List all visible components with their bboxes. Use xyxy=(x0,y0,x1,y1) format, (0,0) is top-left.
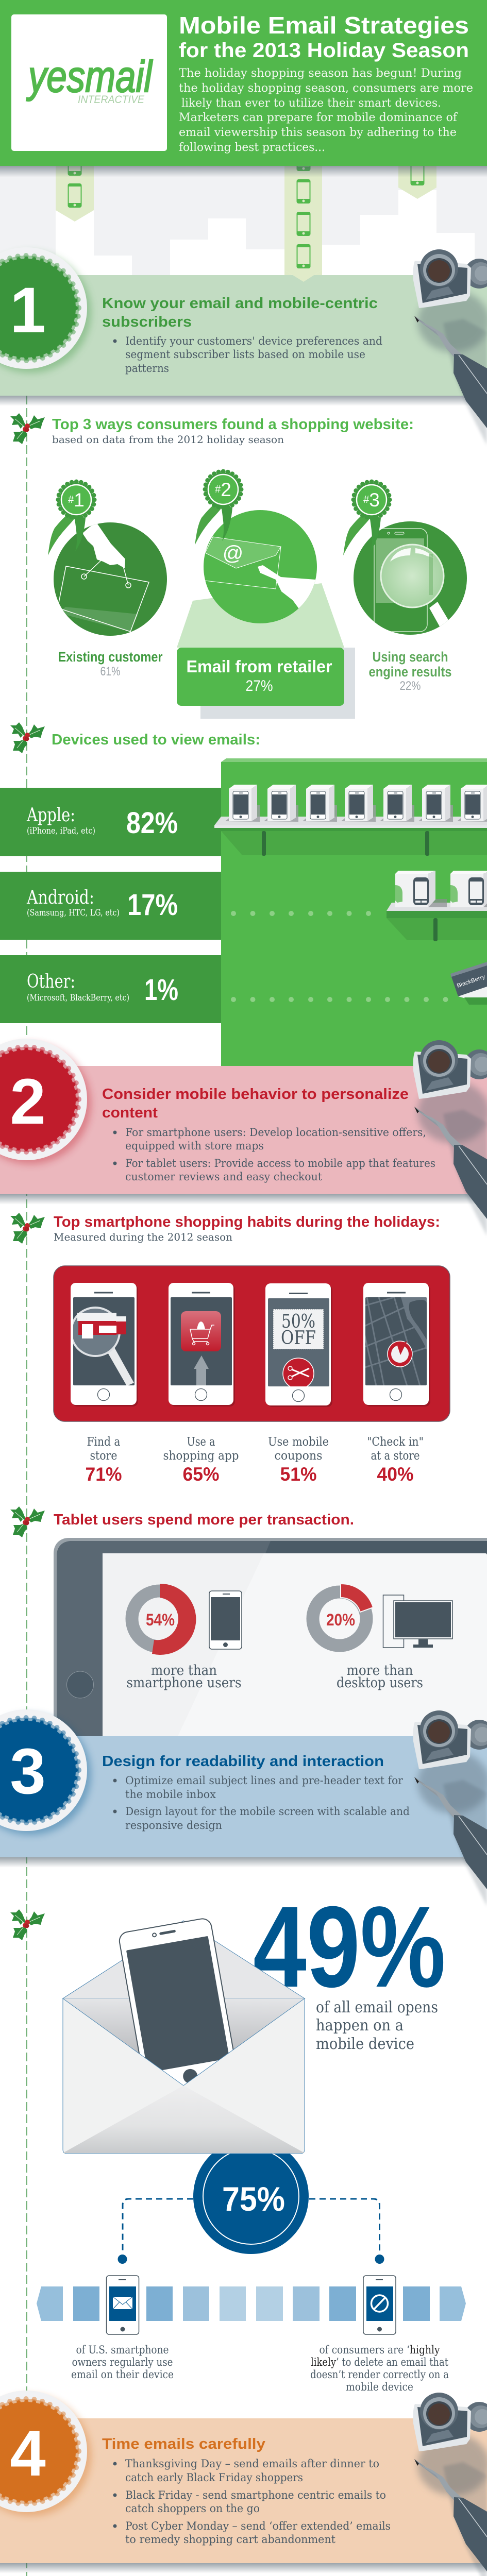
holly: 49 percent xyxy=(10,1909,45,1940)
labels: at a store xyxy=(371,1449,419,1463)
shadow card xyxy=(200,616,355,719)
bullet list xyxy=(113,335,382,375)
labels: shopping app xyxy=(163,1449,239,1463)
ribbon: right arrow of phones xyxy=(398,162,436,199)
panel: search engine results: # xyxy=(363,494,370,505)
label xyxy=(337,1663,423,1691)
bullet list: For tablet users: Provide access to mobile app that features xyxy=(125,1157,435,1170)
phone: coupons: 50% xyxy=(281,1311,315,1332)
ink and pen 1 xyxy=(413,249,487,445)
bullet list: Post Cyber Monday – send ‘offer extended’ emails xyxy=(125,2520,391,2532)
beam xyxy=(177,583,344,648)
card: Email from retailer xyxy=(187,657,332,676)
label xyxy=(369,649,451,680)
labels: 71% xyxy=(86,1464,122,1485)
phone: shopping app xyxy=(169,1283,235,1406)
bullet list xyxy=(113,1774,410,1832)
heading: Time emails carefully xyxy=(102,2436,265,2452)
bar: Apple xyxy=(0,788,221,856)
progress dots: android xyxy=(231,911,371,916)
logo card: INTERACTIVE xyxy=(78,94,145,106)
holly: top 3 ways xyxy=(10,413,45,444)
bar: Android xyxy=(0,872,221,940)
ink and pen 2 xyxy=(413,1040,487,1236)
label: smartphone users xyxy=(127,1675,241,1691)
panel: existing customer: # xyxy=(68,494,74,505)
heading: top 3 ways: based on data from the 2012 holiday season xyxy=(52,433,284,446)
bullet list: Optimize email subject lines and pre-header text for xyxy=(125,1774,404,1787)
heading: Consider mobile behavior to personalize xyxy=(102,1086,409,1103)
bullet list: Design layout for the mobile screen with scalable and xyxy=(125,1805,410,1818)
heading: tablet: Tablet users spend more per transaction. xyxy=(54,1512,354,1528)
badge 1: 1 xyxy=(10,275,46,346)
bullet list: patterns xyxy=(125,362,169,375)
panel: existing customer: 1 xyxy=(74,489,85,511)
labels: Use mobile xyxy=(268,1435,329,1449)
panel: existing customer xyxy=(48,482,167,679)
panel: search engine results: 3 xyxy=(369,489,380,511)
labels: Find a xyxy=(87,1435,121,1449)
progress dots: other xyxy=(231,997,448,1002)
bullet list: to remedy shopping cart abandonment xyxy=(125,2533,336,2546)
label: engine results xyxy=(369,664,451,680)
stat: 49 percent xyxy=(253,1883,446,2053)
donut: 54 percent xyxy=(132,1584,196,1655)
caption: smartphone owners: of U.S. smartphone xyxy=(76,2344,169,2356)
section 2 band xyxy=(0,1066,487,1205)
bullet list: responsive design xyxy=(125,1819,222,1832)
android shelf xyxy=(387,871,487,941)
caption: smartphone owners xyxy=(71,2344,174,2381)
intro text: Marketers can prepare for mobile dominance of xyxy=(179,111,458,124)
labels xyxy=(86,1435,424,1485)
stat: 49 percent: happen on a xyxy=(316,2016,404,2035)
heading: smartphone habits xyxy=(54,1214,440,1243)
title xyxy=(179,12,469,62)
bullet list: equipped with store maps xyxy=(125,1140,264,1152)
dashed timeline xyxy=(26,396,27,2576)
badge 3: 3 xyxy=(10,1736,46,1807)
phone: find a store xyxy=(71,1283,138,1406)
heading xyxy=(102,1086,409,1121)
heading: content xyxy=(102,1105,158,1121)
heading: devices: Devices used to view emails: xyxy=(52,732,260,748)
badge 1 xyxy=(0,247,91,373)
badge 2: 2 xyxy=(10,1066,46,1138)
phone: email xyxy=(106,2276,139,2334)
caption: delete email: likely’ to delete an email that xyxy=(311,2356,448,2368)
stat: 75 percent circle xyxy=(193,2139,309,2254)
panel: smartphone habits xyxy=(54,1266,450,1485)
badge 4 xyxy=(0,2391,91,2516)
icon: phone xyxy=(209,1591,242,1649)
label: Existing customer xyxy=(58,649,163,665)
card: 27% xyxy=(245,677,273,694)
badge 3 xyxy=(0,1709,91,1835)
icon: envelope in hand: @ xyxy=(223,542,243,565)
label xyxy=(127,1663,241,1691)
heading: smartphone habits: Top smartphone shopping habits during the holidays: xyxy=(54,1214,440,1230)
bar: Android: Android: xyxy=(26,887,94,908)
bullet list: Black Friday - send smartphone centric emails to xyxy=(125,2489,386,2501)
heading: subscribers xyxy=(102,314,192,330)
bar: Other xyxy=(0,955,221,1023)
header panel xyxy=(0,0,487,166)
intro text: likely than ever to utilize their smart devices. xyxy=(181,97,441,110)
ink and pen 3 xyxy=(413,1710,487,1906)
ink and pen 4 xyxy=(413,2393,487,2576)
bar: Apple: (iPhone, iPad, etc) xyxy=(27,826,95,836)
icon: envelope in hand xyxy=(204,510,320,623)
connector dots xyxy=(117,2255,384,2264)
intro text: The holiday shopping season has begun! During xyxy=(179,67,462,80)
labels: "Check in" xyxy=(367,1435,424,1449)
stripe timeline xyxy=(37,2276,466,2334)
label: Using search xyxy=(372,649,448,665)
title: for the 2013 Holiday Season xyxy=(179,39,469,62)
caption: smartphone owners: owners regularly use xyxy=(72,2356,173,2368)
panel: tablet xyxy=(54,1538,487,1752)
icon: shopping bag in hand xyxy=(54,522,167,636)
header shadow xyxy=(0,166,487,177)
phone xyxy=(118,1918,240,2106)
intro text: following best practices... xyxy=(179,141,325,154)
heading: Design for readability and interaction xyxy=(102,1753,384,1770)
icon: envelope with phone xyxy=(63,1918,305,2154)
labels: 65% xyxy=(182,1464,220,1485)
shelves panel xyxy=(214,758,487,1066)
stat: 49 percent: 49% xyxy=(253,1883,446,2011)
icon: magnifier over phone xyxy=(354,521,467,635)
phone: coupons xyxy=(265,1283,332,1407)
badge 4: 4 xyxy=(10,2418,46,2489)
bullet list: Thanksgiving Day – send emails after dinner to xyxy=(125,2458,379,2470)
card xyxy=(177,648,344,706)
blackberry box: BlackBerry xyxy=(456,974,486,989)
panel: search engine results xyxy=(343,482,467,693)
logo card xyxy=(11,14,167,151)
panel: search engine results: 22% xyxy=(400,679,421,693)
title: Mobile Email Strategies xyxy=(179,12,469,39)
home button xyxy=(67,1671,94,1698)
bullet list: customer reviews and easy checkout xyxy=(125,1171,323,1183)
panel: existing customer: 61% xyxy=(100,665,121,679)
donut: 54 percent: 54% xyxy=(146,1611,175,1629)
icon: desktop xyxy=(383,1595,452,1648)
ribbon: middle arrow of phones xyxy=(284,147,322,282)
bar: Other: (Microsoft, BlackBerry, etc) xyxy=(27,993,129,1003)
intro text: email viewership this season by adhering to the xyxy=(179,126,457,139)
connectors xyxy=(123,2199,379,2251)
heading: top 3 ways xyxy=(52,416,414,446)
labels: store xyxy=(90,1449,117,1463)
bar: Apple: 82% xyxy=(126,806,178,840)
bullet list: segment subscriber lists based on mobile use xyxy=(125,348,365,361)
caption: delete email xyxy=(310,2344,449,2393)
label: desktop users xyxy=(337,1675,423,1691)
bars: devices used xyxy=(0,788,221,1023)
panel: email from retailer: 2 xyxy=(221,479,231,500)
section 3 band xyxy=(0,1736,487,1868)
bullet list: For smartphone users: Develop location-sensitive offers, xyxy=(125,1126,426,1139)
section 1 band xyxy=(0,245,487,406)
bullet list: Identify your customers' device preferences and xyxy=(125,335,382,347)
panel: email from retailer: # xyxy=(215,484,221,495)
stat: 49 percent: mobile device xyxy=(316,2035,414,2053)
donut: 20 percent xyxy=(313,1584,373,1646)
stat: 75 percent circle: 75% xyxy=(222,2180,285,2218)
section 4 band xyxy=(0,2418,487,2573)
blackberry box xyxy=(450,962,487,1005)
bullet list: catch shoppers on the go xyxy=(125,2502,260,2515)
badge 2 xyxy=(0,1039,91,1164)
ribbon: left arrow of phones xyxy=(56,152,94,222)
bar: Android: (Samsung, HTC, LG, etc) xyxy=(27,908,120,918)
stat: 49 percent: of all email opens xyxy=(316,1998,438,2016)
bullet list: the mobile inbox xyxy=(125,1788,216,1801)
phone: coupons: OFF xyxy=(281,1328,316,1349)
bar: Other: 1% xyxy=(144,973,178,1007)
heading: Know your email and mobile-centric xyxy=(102,295,378,312)
label: more than xyxy=(151,1663,217,1679)
caption: delete email: doesn’t render correctly on a xyxy=(310,2368,449,2381)
holly: devices xyxy=(10,722,45,753)
labels: 51% xyxy=(280,1464,316,1485)
bar: Android: 17% xyxy=(127,888,178,922)
label: more than xyxy=(346,1663,413,1679)
caption: delete email: mobile device xyxy=(346,2381,413,2393)
stepped grey backdrop xyxy=(0,166,487,275)
heading: top 3 ways: Top 3 ways consumers found a shopping website: xyxy=(52,416,414,433)
caption: delete email: of consumers are ‘highly xyxy=(320,2344,440,2356)
panel: email from retailer xyxy=(177,471,355,719)
heading xyxy=(102,295,378,330)
bullet list: catch early Black Friday shoppers xyxy=(125,2471,303,2484)
bar: Apple: Apple: xyxy=(26,805,75,826)
intro text xyxy=(179,67,473,154)
labels: 40% xyxy=(377,1464,413,1485)
labels: Use a xyxy=(187,1435,215,1449)
phone: check in xyxy=(363,1283,430,1406)
donut: 20 percent: 20% xyxy=(326,1611,355,1629)
heading: smartphone habits: Measured during the 2012 season xyxy=(54,1231,232,1243)
bar: Other: Other: xyxy=(27,971,75,992)
holly: smartphone habits xyxy=(10,1213,45,1244)
phone: blocked xyxy=(363,2276,396,2334)
labels: coupons xyxy=(274,1449,323,1463)
intro text: the holiday shopping season, consumers are more xyxy=(179,82,473,95)
caption: smartphone owners: email on their device xyxy=(71,2368,174,2381)
holly: tablet xyxy=(10,1506,45,1537)
bullet list xyxy=(113,1126,435,1183)
apple shelf xyxy=(214,785,487,856)
logo card: yesmail xyxy=(26,52,153,101)
bullet list xyxy=(113,2458,391,2546)
